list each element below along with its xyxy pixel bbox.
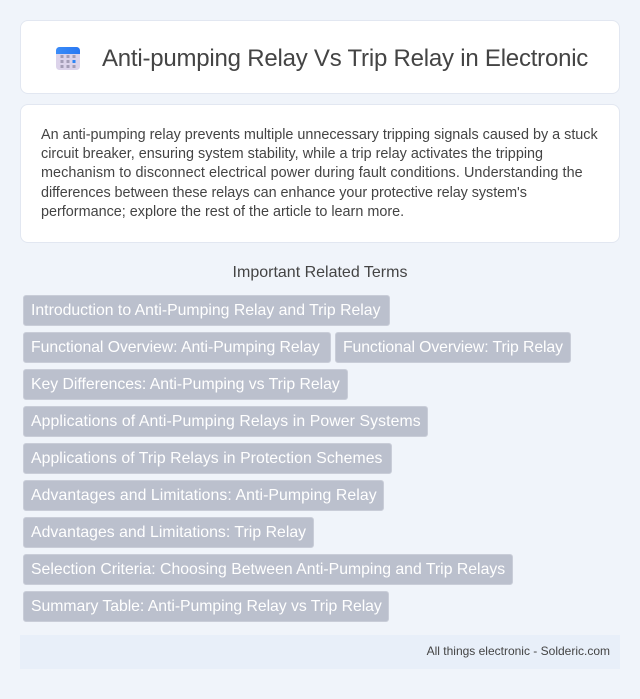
tag: Selection Criteria: Choosing Between Anti-Pumping and Trip Relays [31, 561, 505, 578]
tag: Advantages and Limitations: Trip Relay [31, 524, 306, 541]
tag [23, 332, 331, 363]
intro paragraph: An anti-pumping relay prevents multiple unnecessary tripping signals caused by a stuck [41, 127, 598, 143]
tag: Functional Overview: Trip Relay [343, 339, 563, 356]
intro paragraph: circuit breaker, ensuring system stability, while a trip relay activates the tripping [41, 146, 543, 162]
tag: Introduction to Anti-Pumping Relay and Trip Relay [31, 302, 380, 319]
intro paragraph [41, 127, 598, 220]
tag [23, 591, 389, 622]
tag [23, 406, 428, 437]
tag: Advantages and Limitations: Anti-Pumping Relay [31, 487, 377, 504]
footer credit: All things electronic - Solderic.com [427, 644, 610, 658]
footer [20, 635, 620, 669]
intro paragraph: performance; explore the rest of the article to learn more. [41, 204, 404, 220]
tag: Functional Overview: Anti-Pumping Relay [31, 339, 320, 356]
intro text panel [20, 104, 620, 243]
tag: Key Differences: Anti-Pumping vs Trip Relay [31, 376, 340, 393]
title: Anti-pumping Relay Vs Trip Relay in Electronic [102, 45, 588, 72]
icon: calendar [56, 47, 80, 70]
tag [23, 517, 314, 548]
tag [23, 480, 384, 511]
header card [20, 20, 620, 94]
tag: Applications of Anti-Pumping Relays in Power Systems [31, 413, 421, 430]
tag [23, 443, 392, 474]
tag: Summary Table: Anti-Pumping Relay vs Trip Relay [31, 598, 382, 615]
tag [23, 554, 513, 585]
section heading: Important Related Terms [233, 264, 407, 281]
tag [335, 332, 571, 363]
tag [23, 295, 390, 326]
intro paragraph: mechanism to disconnect electrical power during fault conditions. Understanding the [41, 165, 583, 181]
intro paragraph: differences between these relays can enhance your protective relay system's [41, 185, 527, 201]
related term tags [23, 295, 571, 622]
tag: Applications of Trip Relays in Protection Schemes [31, 450, 383, 467]
tag [23, 369, 348, 400]
